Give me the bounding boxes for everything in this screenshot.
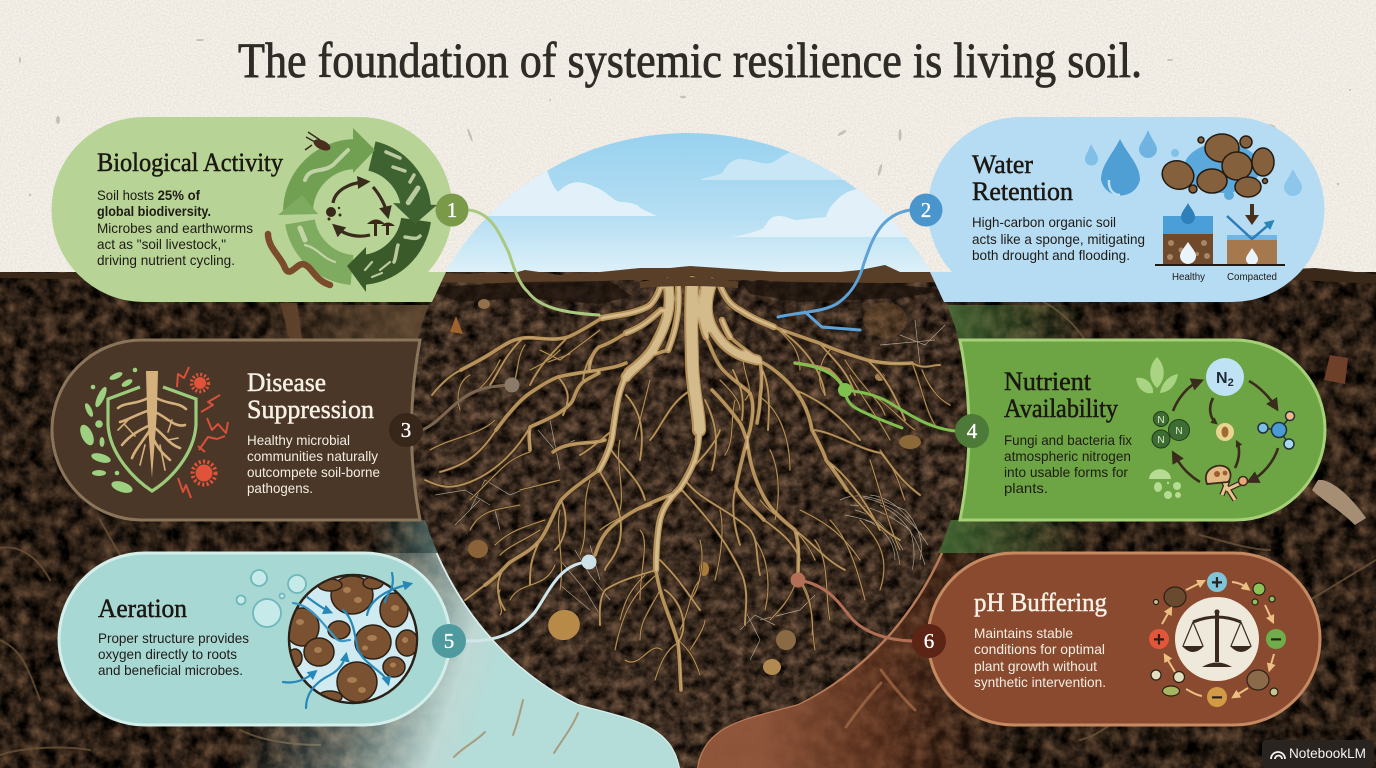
pathogens bbox=[177, 367, 228, 498]
body text bbox=[97, 187, 253, 268]
air flow arrows bbox=[283, 573, 410, 708]
body text: synthetic intervention. bbox=[974, 674, 1106, 690]
body text: driving nutrient cycling. bbox=[97, 252, 235, 268]
panel extension: pH tint bbox=[697, 553, 1030, 768]
heading: Disease bbox=[247, 367, 326, 397]
body text: outcompete soil-borne bbox=[247, 464, 380, 480]
molecule bbox=[1258, 412, 1294, 449]
body text: Maintains stable bbox=[974, 625, 1073, 641]
icon: charge ring: − bbox=[1270, 629, 1282, 651]
body text bbox=[247, 432, 380, 496]
body text: global biodiversity. bbox=[97, 203, 211, 219]
icon: soil aggregates bbox=[1158, 134, 1274, 200]
icon: charge ring: + bbox=[1153, 629, 1165, 651]
panel 1: biological activity bbox=[51, 117, 452, 302]
badge 2 bbox=[910, 194, 942, 226]
root system bbox=[425, 283, 950, 690]
panel extension: aeration tint bbox=[200, 553, 680, 768]
body text: pathogens. bbox=[247, 480, 313, 496]
body text: acts like a sponge, mitigating bbox=[972, 231, 1145, 247]
badge 4: 4 bbox=[967, 419, 978, 443]
icon: soil pore structure bbox=[283, 573, 418, 708]
icon: charge ring: − bbox=[1211, 687, 1223, 709]
panel 6: pH buffering bbox=[928, 553, 1320, 725]
icon: leaves bbox=[1136, 357, 1178, 393]
connector 4 bbox=[795, 363, 955, 431]
badge 6: 6 bbox=[924, 629, 934, 653]
connector anchor dots bbox=[504, 378, 852, 588]
body text: atmospheric nitrogen bbox=[1004, 448, 1131, 464]
panel 4: nutrient availability bbox=[960, 340, 1325, 520]
connector 1 bbox=[468, 210, 599, 315]
body text: Proper structure provides bbox=[98, 630, 249, 646]
badge 1 bbox=[436, 194, 468, 226]
nitrogen nodules bbox=[1152, 412, 1190, 448]
body text: plant growth without bbox=[974, 658, 1097, 674]
soil debris bbox=[0, 300, 1376, 755]
heading: Water bbox=[972, 149, 1033, 179]
icon: charge ring: + bbox=[1211, 572, 1223, 594]
N2 bbox=[1206, 358, 1244, 396]
body text: both drought and flooding. bbox=[972, 247, 1130, 263]
nitrogen nodules: N bbox=[1175, 426, 1183, 437]
body text: Soil hosts 25% of bbox=[97, 187, 200, 203]
body text: communities naturally bbox=[247, 448, 378, 464]
heading: Aeration bbox=[98, 593, 187, 623]
heading bbox=[1004, 366, 1119, 423]
heading: pH Buffering bbox=[974, 587, 1107, 617]
body text: act as "soil livestock," bbox=[97, 236, 226, 252]
body text: Microbes and earthworms bbox=[97, 220, 253, 236]
icon: nitrogen cycle: 2 bbox=[1228, 377, 1234, 389]
body text: plants. bbox=[1004, 480, 1048, 496]
nitrogen nodules: N bbox=[1157, 415, 1165, 426]
icon: charge ring bbox=[1149, 572, 1286, 709]
heading: Retention bbox=[972, 176, 1073, 206]
body text: oxygen directly to roots bbox=[98, 646, 237, 662]
badge 4 bbox=[955, 414, 989, 448]
heading bbox=[247, 367, 374, 424]
heading: Availability bbox=[1004, 393, 1119, 423]
badge 3: 3 bbox=[401, 418, 411, 442]
badge 1: 1 bbox=[447, 198, 457, 222]
pebbles bbox=[450, 299, 921, 675]
body text bbox=[972, 214, 1145, 263]
heading: Biological Activity bbox=[97, 147, 284, 177]
NotebookLM watermark bbox=[1262, 740, 1374, 768]
clouds bbox=[470, 152, 920, 237]
connector 3 bbox=[422, 385, 512, 430]
body text: into usable forms for bbox=[1004, 464, 1128, 480]
beneficial microbes bbox=[77, 368, 137, 495]
icon: nutrient cycle bbox=[268, 128, 437, 292]
icon: healthy vs compacted: Compacted bbox=[1227, 272, 1277, 283]
paper flecks bbox=[19, 39, 1351, 196]
icon: healthy vs compacted: Healthy bbox=[1172, 272, 1205, 283]
badge 5: 5 bbox=[444, 629, 454, 653]
nitrogen nodules: N bbox=[1157, 435, 1165, 446]
mycorrhizal fungus bbox=[1206, 466, 1248, 500]
panel 5: aeration bbox=[59, 553, 450, 725]
underground soil bbox=[400, 272, 980, 768]
heading: Nutrient bbox=[1004, 366, 1092, 396]
icon: root shield bbox=[77, 367, 228, 498]
central microbe bbox=[1216, 423, 1234, 441]
connector lines bbox=[422, 210, 955, 641]
beetle bbox=[305, 132, 332, 153]
paper background bbox=[0, 0, 1376, 280]
connector 2 bbox=[778, 210, 910, 330]
icon: balance scale bbox=[1175, 597, 1259, 681]
badge 6 bbox=[912, 624, 946, 658]
badge 2: 2 bbox=[921, 198, 931, 222]
icon: nitrogen cycle bbox=[1149, 358, 1294, 500]
icon: healthy vs compacted bbox=[1155, 203, 1285, 283]
earthworm bbox=[268, 234, 330, 285]
connector 5 bbox=[466, 562, 589, 641]
panel backing tints bbox=[250, 305, 1090, 553]
heading bbox=[972, 149, 1073, 206]
sky bbox=[446, 133, 930, 272]
soil background bbox=[0, 268, 1376, 768]
mushrooms and soil bbox=[326, 207, 395, 236]
icon: nitrogen cycle: N bbox=[1216, 370, 1228, 387]
badge 5 bbox=[432, 624, 466, 658]
inner cycle arrows bbox=[333, 182, 387, 236]
title: The foundation of systemic resilience is living soil. bbox=[238, 32, 1142, 88]
panel 2: water retention bbox=[928, 117, 1324, 302]
body text bbox=[1004, 432, 1132, 496]
heading: Suppression bbox=[247, 394, 374, 424]
fine mycelium bbox=[435, 320, 945, 660]
panel 3: disease suppression bbox=[52, 340, 420, 520]
icon: water drops bbox=[1085, 130, 1302, 196]
body text: and beneficial microbes. bbox=[98, 662, 243, 678]
body text: Fungi and bacteria fix bbox=[1004, 432, 1132, 448]
pale spores bbox=[1149, 469, 1181, 499]
NotebookLM watermark: NotebookLM bbox=[1289, 745, 1366, 761]
body text: High-carbon organic soil bbox=[972, 214, 1116, 230]
connector 6 bbox=[798, 580, 912, 641]
central soil cross-section bbox=[400, 130, 980, 768]
body text: Healthy microbial bbox=[247, 432, 350, 448]
body text bbox=[974, 625, 1106, 690]
body text bbox=[98, 630, 249, 678]
badge 3 bbox=[389, 413, 423, 447]
body text: conditions for optimal bbox=[974, 641, 1105, 657]
icon: oxygen bubbles bbox=[236, 570, 306, 627]
